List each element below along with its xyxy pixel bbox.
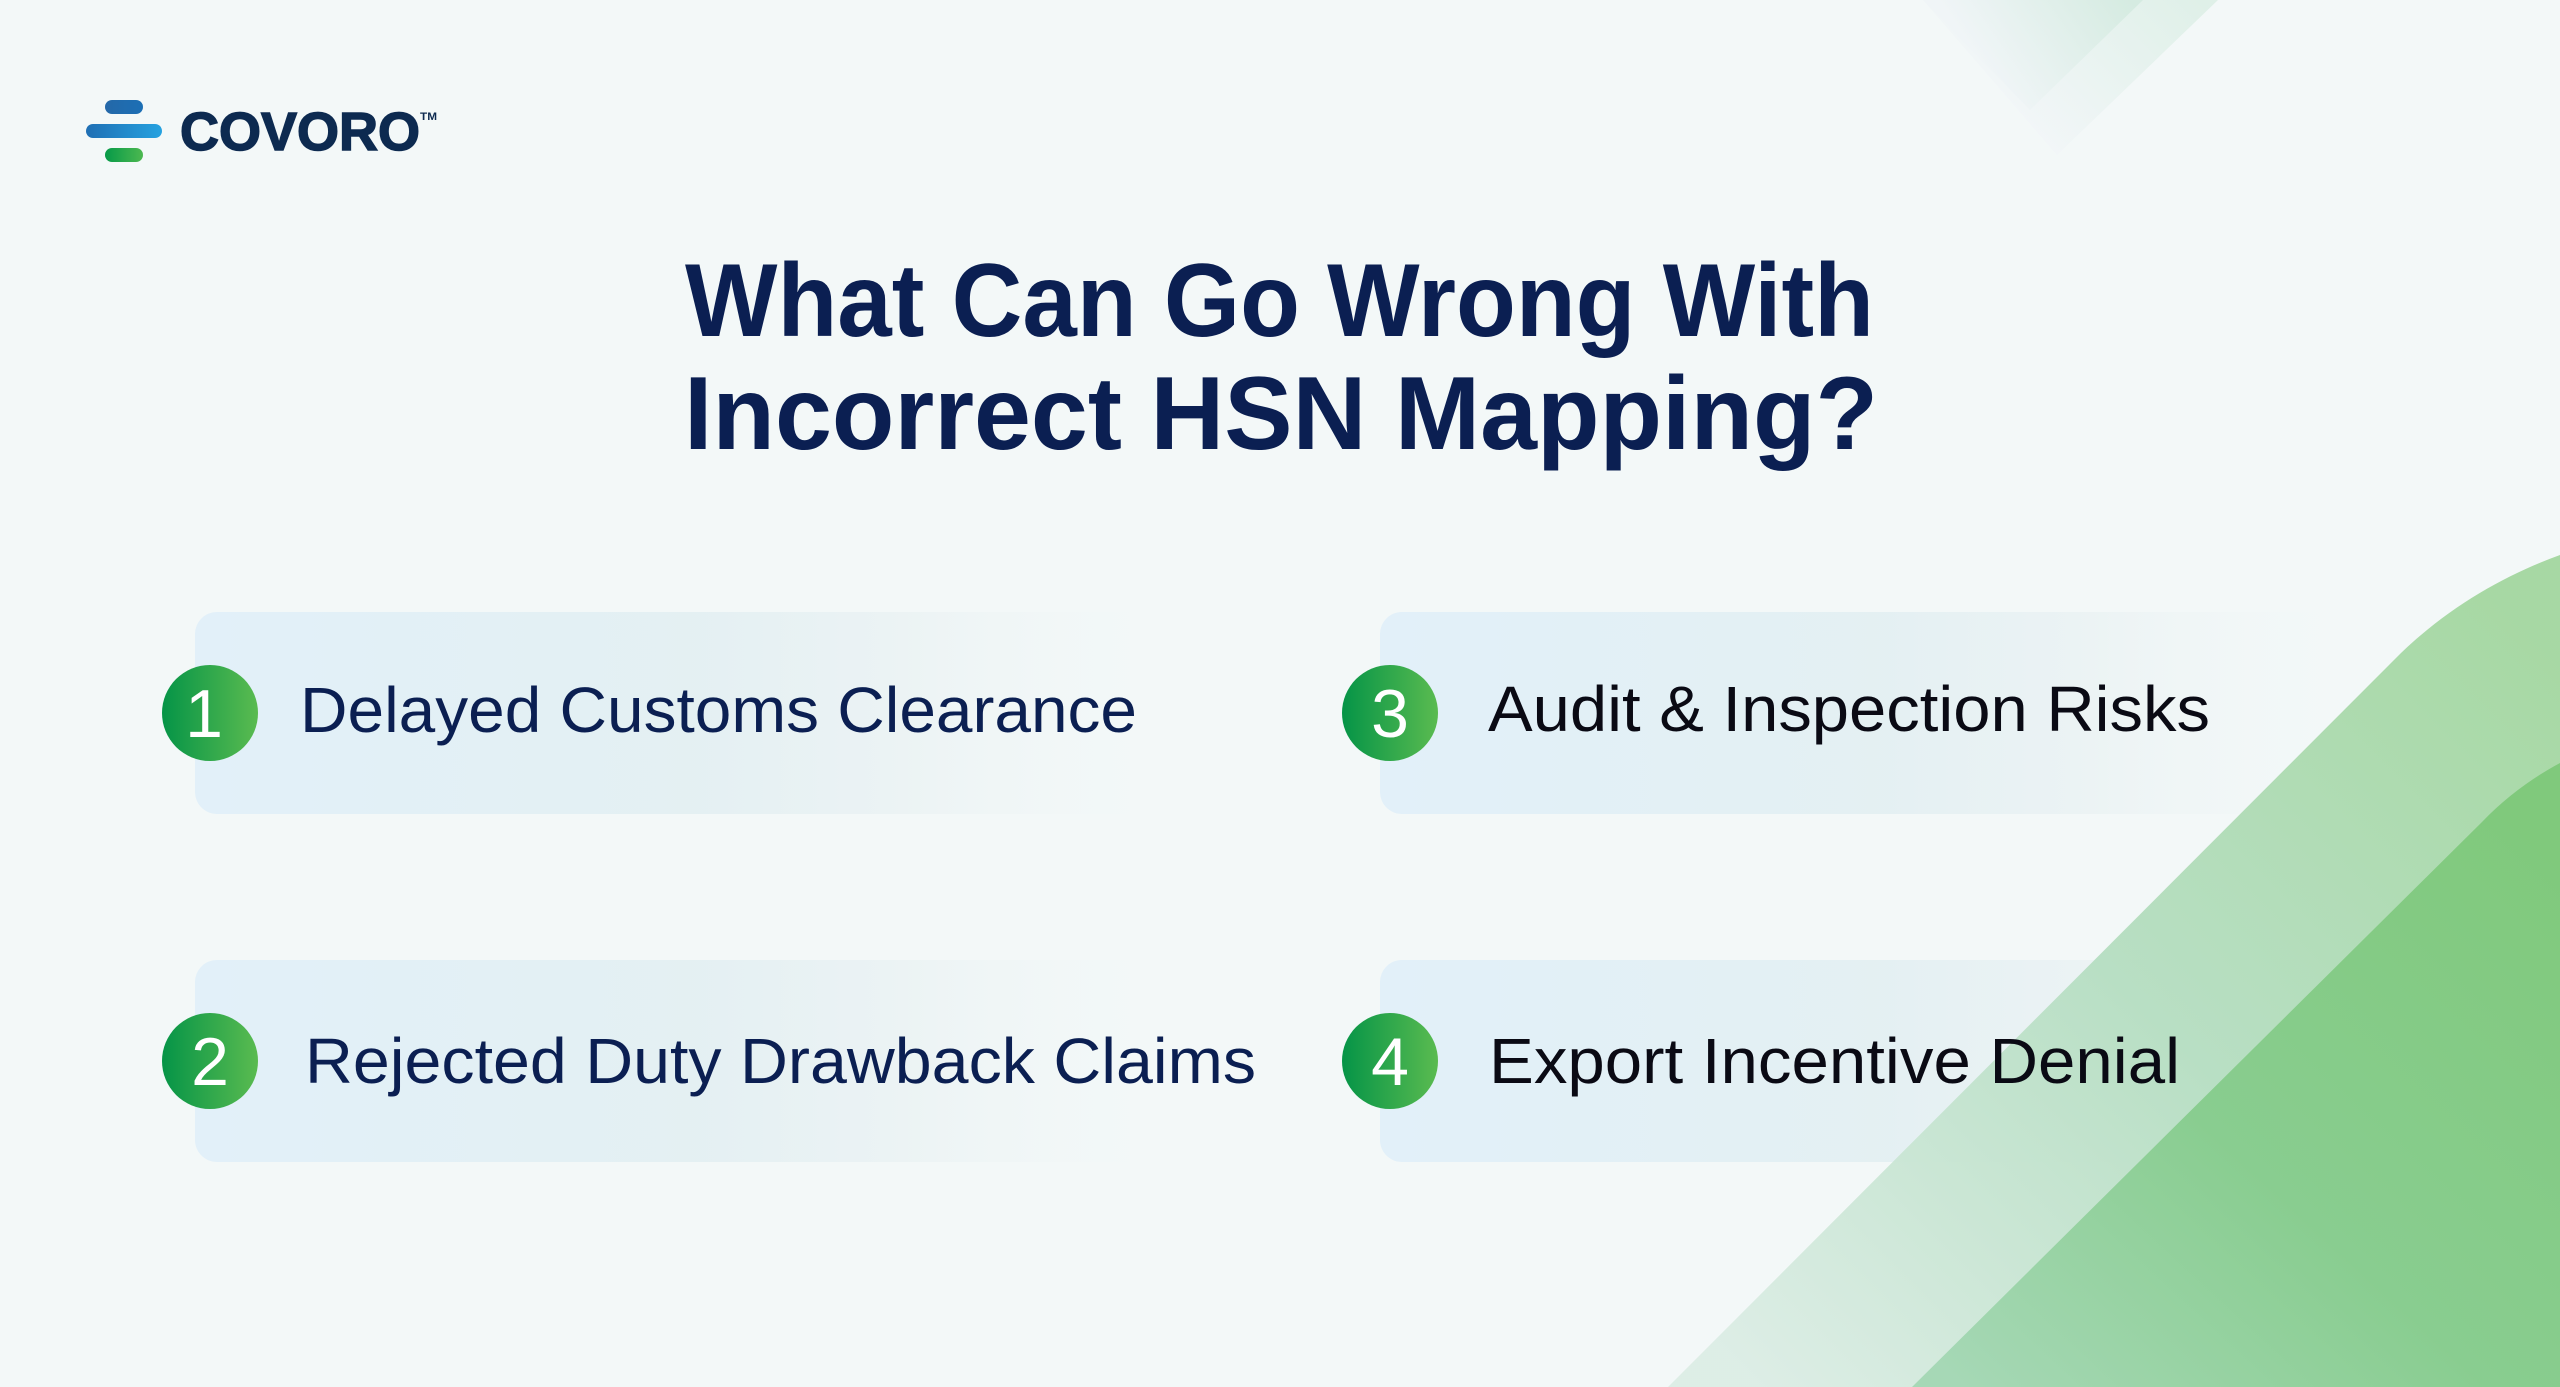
item 2: Rejected Duty Drawback Claims (162, 1013, 1256, 1109)
item 1: Delayed Customs Clearance (162, 665, 1137, 761)
logo wordmark: COVORO (180, 102, 420, 162)
number badge 2 (162, 1013, 258, 1109)
number badge 1: 1 (185, 676, 223, 752)
card background 1 (195, 612, 1172, 814)
title: What Can Go Wrong With (685, 243, 1874, 359)
label 4: Export Incentive Denial (1489, 1025, 2180, 1097)
item 3: Audit & Inspection Risks (1342, 665, 2210, 761)
label 2: Rejected Duty Drawback Claims (305, 1025, 1256, 1097)
decorative green shapes: bottom right (1668, 555, 2560, 1387)
card background 2 (195, 960, 1172, 1162)
card backgrounds (195, 612, 2360, 1162)
label 1: Delayed Customs Clearance (300, 674, 1137, 746)
number badge 4: 4 (1371, 1024, 1409, 1100)
number badge 4 (1342, 1013, 1438, 1109)
card background 3 (1380, 612, 2360, 814)
decorative chevron: top right (1923, 0, 2218, 155)
logo mark (86, 100, 162, 162)
title (684, 243, 1878, 472)
number badge 2: 2 (191, 1024, 229, 1100)
number badge 3: 3 (1371, 676, 1409, 752)
label 3: Audit & Inspection Risks (1488, 673, 2210, 745)
title: Incorrect HSN Mapping? (684, 356, 1878, 472)
trademark: TM (420, 111, 437, 123)
logo: Covoro (86, 100, 437, 162)
card background 4 (1380, 960, 2360, 1162)
number badge 3 (1342, 665, 1438, 761)
item 4: Export Incentive Denial (1342, 1013, 2180, 1109)
number badge 1 (162, 665, 258, 761)
